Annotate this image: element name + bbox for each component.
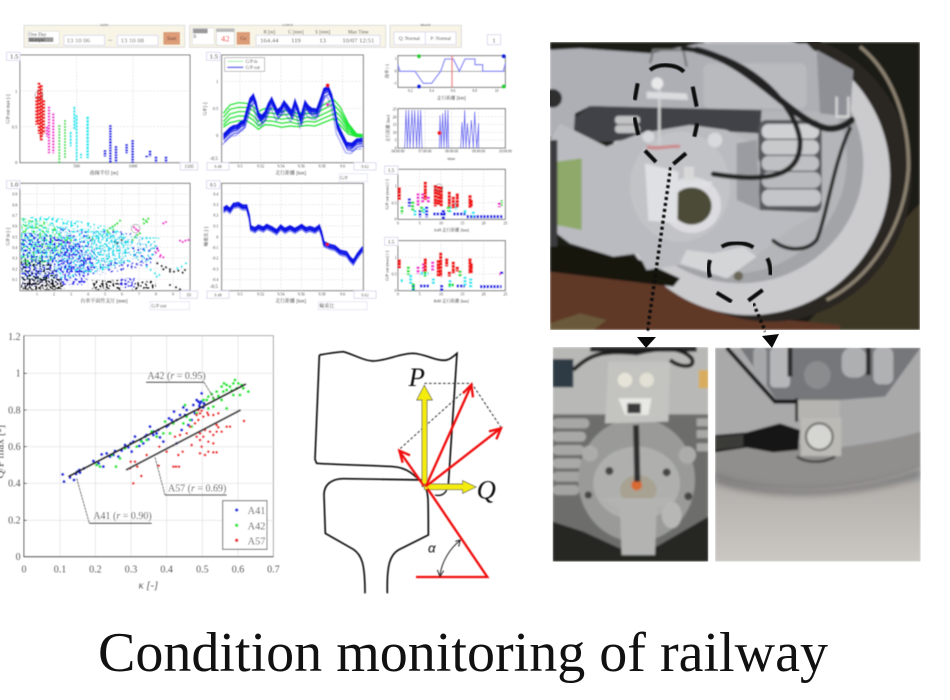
control bar: curve: Max Time: [348, 30, 369, 35]
axes ticks and labels: 0.1: [54, 564, 66, 575]
chart: distance over time strip: 5: [395, 138, 397, 143]
chart: G/P in vs track irregularity: 0.2: [12, 266, 17, 271]
cloud: blue points dense: [21, 232, 95, 287]
wheel background: [715, 348, 921, 483]
chart: curvature strip: 9.2: [408, 89, 413, 93]
axes ticks and labels: 0.8: [8, 405, 21, 416]
scatter cloud: track irregularity points: [21, 216, 160, 290]
cables: [573, 349, 693, 370]
axes ticks and labels: 0.6: [232, 564, 244, 575]
chart: distance over time strip: 09:00:00: [472, 150, 485, 154]
control bar: date: Multiple: [29, 38, 45, 43]
data: A41 blue points: [63, 393, 204, 482]
control bar: date: Start: [167, 37, 177, 42]
bracket on frame: [837, 97, 848, 117]
chart: G/P in and out vs distance: 9.6: [340, 163, 345, 168]
chart: A-line G/P max: 0: [397, 220, 399, 225]
sensor rod: [636, 425, 637, 482]
control bar: date: DATE: [100, 23, 109, 27]
chart: distance over time strip: 10:00:00: [499, 150, 512, 154]
chart: G/P in vs track irregularity: 6: [121, 291, 123, 296]
chart: G/P in and out vs distance: G/P out: [246, 66, 261, 71]
axes ticks and labels: 0.4: [8, 479, 21, 490]
rail outline: [324, 479, 428, 593]
chart: wheel load ratio vs distance: -0.5: [210, 285, 218, 290]
scatter chart: G/P max vs kappa: [0, 332, 280, 591]
chart: G/P in vs track irregularity: 0.3: [12, 256, 17, 261]
bearing cover: [642, 128, 728, 235]
chart: G/P in vs track irregularity: 0.7: [12, 213, 17, 218]
axes ticks and labels: 0.3: [125, 564, 137, 575]
control bar: curve: 10/07 12:51: [342, 38, 374, 45]
axes ticks and labels: 1: [16, 369, 21, 380]
sensor rod: [647, 50, 694, 180]
control bar: date: [24, 23, 185, 47]
chart: G/P in and out vs distance: -0.5: [210, 157, 218, 162]
control bar: brake status: P: Normal: [430, 37, 452, 42]
chart: G/P in and out vs distance: 1.5: [210, 53, 219, 60]
chart: wheel load ratio vs distance: 9.48: [214, 292, 222, 297]
lower left shadow: [550, 243, 680, 287]
chart: G/P in vs track irregularity: 8: [155, 291, 157, 296]
chart: G/P max vs curve radius: [6, 52, 198, 177]
wheel: [610, 32, 912, 322]
chart: G/P in and out vs distance: G/P: [340, 177, 348, 182]
control bar: brake status: BRAIN: [420, 23, 431, 27]
chart: G/P in and out vs distance: G/P in: [246, 60, 258, 65]
chart: curvature strip: 9.4: [429, 89, 434, 93]
chart: wheel load ratio vs distance: 輪重比: [319, 303, 334, 310]
frame window: [575, 106, 762, 142]
cloud: black points dense: [21, 258, 65, 290]
chart: B-line G/P max: 0: [397, 292, 399, 297]
chart: wheel load ratio vs distance: 0.5: [210, 184, 217, 189]
chart: A-line G/P max: G/P out (max) [-]: [384, 179, 389, 209]
chart: A-line G/P max: 5: [419, 220, 421, 225]
chart: G/P in vs track irregularity: 5: [104, 291, 106, 296]
arrow: Q force: [424, 475, 496, 505]
control bar: curve: R [m]: [263, 30, 276, 35]
photo: bogie axle box: [543, 32, 920, 332]
chart: wheel load ratio vs distance: 9.5: [238, 291, 242, 296]
control bar: curve: Go: [240, 37, 247, 42]
chart: G/P in vs track irregularity: 1.0: [10, 182, 19, 189]
chart: wheel load ratio vs distance: 9.54: [278, 291, 284, 296]
chart: distance over time strip: 06:00:00: [391, 150, 405, 154]
chart: curvature strip: [383, 54, 506, 101]
chart: A-line G/P max: 15: [460, 220, 464, 225]
chart: G/P in and out vs distance: 9.58: [319, 163, 325, 168]
chart: G/P in and out vs distance: 9.48: [214, 164, 222, 169]
alpha angle marker: α: [428, 541, 436, 556]
dotted leader: upper sensor: [647, 167, 671, 332]
cloud: blue points sparse: [60, 228, 160, 275]
chart: distance over time strip: [384, 107, 512, 161]
chart: curvature strip: -1: [393, 81, 397, 86]
cloud: black points right: [132, 280, 156, 290]
chart: G/P in vs track irregularity: 0.1: [12, 277, 17, 282]
page number box: 1: [492, 37, 496, 44]
chart: A-line G/P max: A48 走行距離 [km]: [434, 226, 470, 233]
data: A42 green points: [97, 380, 248, 467]
cable: [715, 423, 800, 452]
control bar: date: 13 10 06: [67, 38, 91, 45]
chart: G/P in vs track irregularity: G/P in [-]: [6, 227, 11, 246]
chart: G/P in and out vs distance: 9.5: [238, 163, 242, 168]
chart: wheel load ratio vs distance: 0.4: [213, 191, 218, 196]
fit line: A57: [126, 410, 241, 470]
chart: G/P max vs curve radius: 0: [15, 160, 17, 165]
chart: G/P max vs curve radius: 1.5: [10, 53, 19, 60]
mount block: [645, 163, 678, 223]
legend: [223, 501, 267, 549]
chart: wheel load ratio vs distance: 輪重比 [-]: [202, 226, 209, 247]
ballast: [807, 203, 920, 330]
chart: wheel load ratio vs distance: 9.62: [361, 292, 369, 297]
chart: G/P in vs track irregularity: 10: [186, 294, 192, 299]
chart: B-line G/P max: 0: [395, 288, 397, 293]
alpha angle marker: [428, 540, 460, 577]
chart: distance over time strip: 08:00:00: [445, 150, 458, 154]
legend: A42: [248, 521, 265, 532]
legend: A57: [248, 536, 265, 547]
axes ticks and labels: 0.6: [8, 442, 21, 453]
lower backdrop: [553, 414, 708, 562]
upper backdrop: [553, 347, 708, 415]
top bracket: [605, 362, 670, 423]
axes ticks and labels: 0.2: [8, 515, 21, 526]
chart: G/P max vs curve radius: 500: [73, 163, 80, 168]
data: A57 red points: [130, 410, 244, 483]
chart: wheel load ratio vs distance: -0.1: [212, 245, 218, 250]
chart: A-line G/P max: 1.5: [388, 169, 395, 174]
fit line: A41/A42: [68, 384, 246, 477]
dotted leader: lower sensor: [753, 303, 765, 332]
chart: wheel load ratio vs distance: -0.3: [212, 266, 218, 271]
chart: wheel load ratio vs distance: [202, 181, 376, 310]
chart: wheel load ratio vs distance: -0.4: [212, 277, 218, 282]
cloud: blue points patch: [120, 278, 135, 288]
chart: G/P in vs track irregularity: 0.9: [12, 192, 17, 197]
arrowhead: lower sensor leader: [762, 334, 779, 348]
annotation: A41: [77, 478, 152, 523]
arrow: Q force: Q: [477, 475, 496, 505]
chart: wheel load ratio vs distance: 0: [216, 234, 218, 239]
chart: curvature strip: 1: [395, 56, 397, 61]
chart: distance over time strip: 20: [393, 114, 397, 119]
chart: B-line G/P max: [384, 237, 507, 305]
chart: G/P max vs curve radius: 1000: [129, 163, 137, 168]
chart: B-line G/P max: 0.5: [392, 272, 397, 277]
annotation: A57: A57 (r = 0.69): [168, 483, 226, 494]
control bar: curve: [190, 23, 386, 47]
chart: G/P in and out vs distance: [204, 52, 376, 182]
chart: G/P in vs track irregularity: 9: [172, 291, 174, 296]
chart: wheel load ratio vs distance: 0.1: [213, 223, 218, 228]
angle arc near contact: [435, 487, 447, 495]
chart: G/P max vs curve radius: 1500: [184, 165, 194, 170]
chart: B-line G/P max: 25: [503, 292, 507, 297]
chart: wheel load ratio vs distance: 9.6: [340, 291, 345, 296]
sensor block: [797, 400, 840, 418]
axes ticks and labels: 0.7: [267, 564, 280, 575]
cloud: cyan points right: [90, 232, 160, 262]
side panel: [557, 158, 582, 230]
axes ticks and labels: κ [-]: [139, 580, 158, 591]
chart: A-line G/P max: 1: [395, 184, 397, 189]
chart: G/P in vs track irregularity: 4: [87, 291, 89, 296]
control bar: date: 13 10 08: [121, 38, 145, 45]
chart: distance over time strip: 10: [393, 130, 397, 135]
chart: G/P in vs track irregularity: 3: [70, 291, 72, 296]
chart: G/P max vs curve radius: G/P out max [-]: [6, 94, 11, 124]
photo: bearing temperature sensor close-up: [715, 348, 921, 562]
chart: B-line G/P max: G/P out (max) [-]: [384, 250, 389, 281]
chart: curvature strip: 10: [495, 89, 499, 93]
upper casting: [740, 348, 921, 400]
chart: G/P in and out vs distance: 9.54: [278, 163, 284, 168]
chart: G/P max vs curve radius: 1: [15, 89, 17, 94]
axes box: [24, 336, 273, 557]
chart: B-line G/P max: B48 走行距離 [km]: [434, 298, 469, 305]
chart: G/P in vs track irregularity: 0.8: [12, 202, 17, 207]
chart: wheel load ratio vs distance: 走行距離 [km]: [275, 298, 306, 305]
chart: B-line G/P max: 1: [395, 255, 397, 260]
chart: G/P in vs track irregularity: 台車平面性支圧 [mm]: [80, 298, 128, 305]
page number box: [487, 35, 501, 45]
chart: G/P in vs track irregularity: G/P out: [151, 305, 167, 310]
chart: wheel load ratio vs distance: -0.2: [212, 256, 218, 261]
bolt: [804, 361, 831, 389]
control bar: curve: 42: [221, 34, 230, 44]
chart: distance over time strip: 0: [395, 145, 397, 150]
photo backdrop: [550, 42, 920, 330]
arrow: P force: P: [408, 362, 425, 392]
chart: G/P in vs track irregularity: 0.4: [12, 245, 17, 250]
chart: wheel load ratio vs distance: 9.56: [298, 291, 305, 296]
annotation: A57: [155, 457, 227, 495]
chart: B-line G/P max: 10: [439, 292, 443, 297]
control bar: curve: C [mm]: [288, 30, 304, 35]
chart: wheel load ratio vs distance: 0.2: [213, 213, 218, 218]
edge shadow: [727, 348, 797, 402]
annotation: A42: [146, 371, 215, 400]
dashed force parallelogram: [399, 383, 501, 449]
title: Condition monitoring of railway: [98, 622, 828, 684]
arrows: resultant red forces: [399, 385, 501, 487]
cloud: black points middle: [92, 280, 122, 290]
chart: wheel load ratio vs distance: 0.3: [213, 202, 218, 207]
photo: wheel load sensor close-up: [553, 347, 708, 562]
cloud: black points low band: [21, 276, 65, 290]
bogie top frame: [550, 43, 822, 142]
rail: [550, 272, 840, 330]
chart: A-line G/P max: 25: [503, 220, 507, 225]
chart: B-line G/P max: 1.5: [388, 240, 395, 245]
legend: A41: [248, 506, 265, 517]
axes ticks and labels: 0.2: [89, 564, 102, 575]
control bar: curve: S [mm]: [315, 30, 331, 35]
chart: distance over time strip: 15: [393, 122, 397, 127]
dashed callout: lower sensor: [708, 243, 771, 302]
chart: G/P max vs curve radius: 曲線半径 [m]: [90, 170, 119, 177]
control bar: brake status: [390, 23, 461, 47]
coil spring: [615, 116, 822, 213]
control bar: brake status: Q: Normal: [399, 37, 421, 42]
panel: monitoring dashboard screenshot: [6, 23, 512, 310]
chart: G/P in vs track irregularity: 1: [36, 291, 38, 296]
chart: G/P in vs track irregularity: [6, 181, 197, 310]
chart: G/P in and out vs distance: G/P [-]: [204, 102, 209, 115]
axes ticks and labels: 0.5: [196, 564, 209, 575]
axes ticks and labels: 0: [16, 552, 21, 563]
chart: curvature strip: 走行距離 [km]: [437, 94, 466, 101]
arrow: P force: [408, 362, 432, 487]
control bar: curve: 13: [319, 38, 327, 45]
mount foot: [620, 498, 658, 557]
springs: [553, 418, 708, 495]
cables: [683, 48, 852, 249]
axle cover: [578, 418, 695, 542]
cloud: green points: [21, 218, 75, 268]
chart: G/P in and out vs distance: 9.52: [257, 163, 264, 168]
control bar: date: ~: [108, 38, 112, 45]
control bar: curve: CURVE: [282, 23, 293, 27]
chart: distance over time strip: time: [447, 156, 455, 161]
chart: curvature strip: 9.8: [472, 89, 477, 93]
chart: curvature strip: 曲率 [-]: [383, 64, 390, 78]
control bar: curve: 164.44: [260, 38, 279, 45]
chart: wheel load ratio vs distance: 9.58: [319, 291, 325, 296]
chart: B-line G/P max: 5: [419, 292, 421, 297]
chart: G/P in and out vs distance: 9.56: [298, 163, 305, 168]
chart: G/P max vs curve radius: 0.5: [12, 125, 17, 130]
chart: distance over time strip: 25: [393, 107, 397, 112]
axle box body: [550, 123, 820, 278]
chart: A-line G/P max: 20: [482, 220, 486, 225]
dashed callout: upper sensor: [634, 65, 697, 164]
chart: G/P in vs track irregularity: 0.5: [12, 234, 17, 239]
wheel outline: [315, 352, 457, 486]
chart: G/P in and out vs distance: 1: [216, 79, 218, 84]
control bar: date: One Day: [29, 33, 47, 38]
red incline triangle: [416, 488, 487, 577]
chart: B-line G/P max: 15: [460, 292, 464, 297]
axes ticks and labels: [0, 332, 280, 591]
chart: distance over time strip: 07:00:00: [418, 150, 432, 154]
chart: G/P in and out vs distance: 走行距離 [km]: [275, 170, 306, 177]
diagram: wheel and rail contact forces: [315, 352, 501, 593]
chart: G/P in and out vs distance: 0: [216, 133, 218, 138]
annotation: A41: A41 (r = 0.90): [93, 511, 152, 522]
axes ticks and labels: 1.2: [8, 332, 21, 343]
chart: G/P in and out vs distance: 9.62: [361, 164, 369, 169]
chart: curvature strip: 0: [395, 69, 397, 74]
cloud: cyan points: [21, 216, 130, 282]
axes ticks and labels: 0: [21, 564, 26, 575]
control bar: curve: B: [193, 35, 196, 40]
chart: curvature strip: 9.6: [451, 89, 455, 93]
chart: wheel load ratio vs distance: 9.52: [257, 291, 264, 296]
chart: distance over time strip: 走行距離 [km]: [384, 114, 391, 142]
annotation: A42: A42 (r = 0.95): [147, 371, 206, 382]
chart: A-line G/P max: 10: [439, 220, 443, 225]
arrowhead: upper sensor leader: [637, 337, 656, 348]
chart: G/P in vs track irregularity: 2: [53, 291, 55, 296]
axes ticks and labels: 0.4: [160, 564, 173, 575]
chart: A-line G/P max: [384, 166, 507, 233]
chart: A-line G/P max: 0: [395, 217, 397, 222]
chart: B-line G/P max: 20: [482, 292, 486, 297]
chart: G/P in vs track irregularity: 7: [138, 291, 140, 296]
chart: G/P in vs track irregularity: 0.6: [12, 224, 17, 229]
chart: G/P in and out vs distance: 0.5: [213, 106, 218, 111]
control bar: curve: 119: [291, 38, 302, 45]
wheel lower bolt: [734, 271, 743, 281]
chart: A-line G/P max: 0.5: [392, 200, 397, 205]
